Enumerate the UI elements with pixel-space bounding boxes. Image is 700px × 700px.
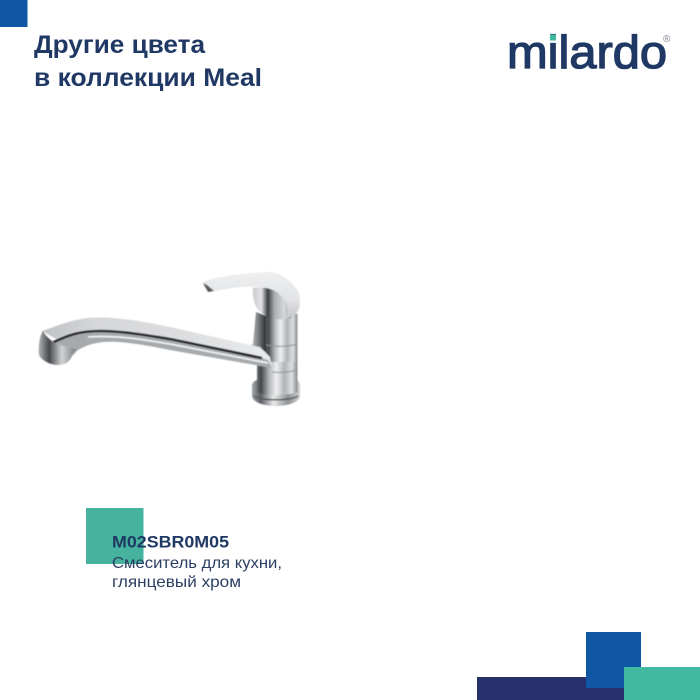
spout tip bbox=[39, 331, 76, 365]
decorative corner square bbox=[0, 0, 28, 27]
faucet neck bbox=[250, 312, 266, 352]
product image: chrome kitchen faucet bbox=[39, 272, 300, 406]
dome under handle bbox=[253, 287, 292, 319]
faucet body cylinder bbox=[265, 314, 298, 364]
logo: milardo: ® bbox=[663, 34, 671, 45]
decorative corner blocks bbox=[477, 632, 700, 700]
product caption: Смеситель для кухни, bbox=[112, 555, 282, 572]
product caption: глянцевый хром bbox=[112, 574, 241, 591]
teal accent square behind caption bbox=[86, 508, 144, 564]
title: в коллекции Meal bbox=[34, 64, 262, 92]
title bbox=[34, 31, 262, 92]
product caption bbox=[112, 532, 282, 591]
title: Другие цвета bbox=[34, 31, 206, 59]
faucet handle lever bbox=[203, 272, 300, 318]
logo: milardo: milardo bbox=[507, 26, 667, 78]
faucet spout bbox=[42, 317, 272, 368]
product caption: M02SBR0M05 bbox=[112, 532, 229, 552]
faucet base bbox=[252, 380, 300, 406]
